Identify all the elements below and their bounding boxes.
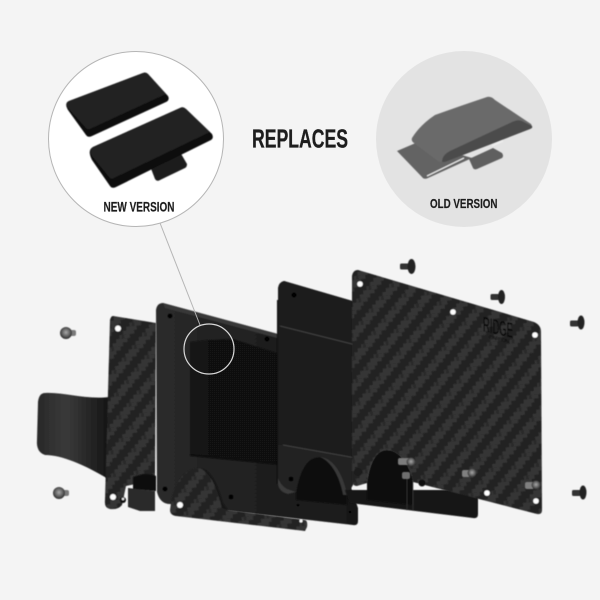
panel: black metal plate [156, 303, 358, 525]
panel: elastic band [190, 339, 280, 465]
icon: loose screws left side [53, 327, 76, 499]
panel: front carbon plate: RIDGE [483, 312, 513, 343]
panel: front carbon plate [352, 270, 542, 514]
label: old version: OLD VERSION [430, 196, 498, 211]
panel: rear carbon plate [105, 316, 156, 509]
clip: money clip [37, 393, 110, 480]
logo: ridge carbon [483, 312, 513, 346]
arch cut-out shadow [296, 457, 347, 505]
icon: old clip [397, 97, 532, 179]
panel: third metal plate [278, 281, 356, 495]
icon: new lower band with tab [90, 107, 213, 188]
heading: replaces: REPLACES [252, 126, 348, 154]
magnifier circle [184, 324, 234, 374]
callout line [160, 223, 200, 325]
callout: old version circle [376, 51, 552, 227]
icon: small bracket block [120, 474, 156, 511]
icon: loose screws right side [400, 259, 586, 500]
callout: new version circle [48, 52, 224, 226]
panel: second plate bottom strip [345, 490, 478, 518]
label: new version: NEW VERSION [104, 200, 174, 214]
panel: lower carbon piece [170, 468, 307, 531]
screws: silver through front plate [398, 458, 540, 490]
logo: ridge carbon: CARBON [489, 335, 509, 345]
icon: new upper band [66, 73, 169, 137]
